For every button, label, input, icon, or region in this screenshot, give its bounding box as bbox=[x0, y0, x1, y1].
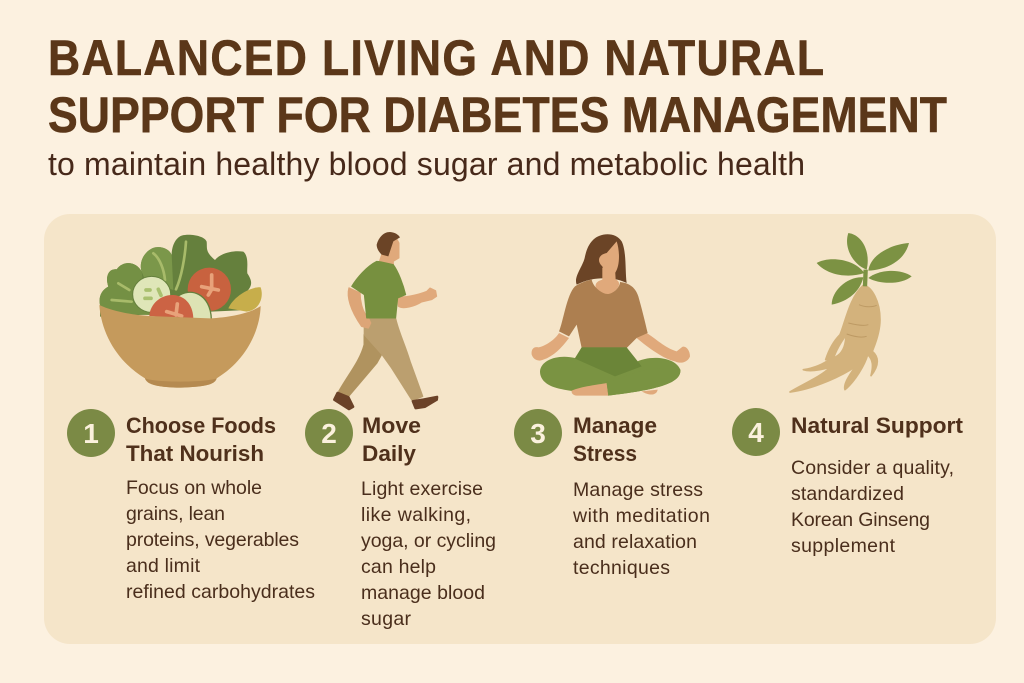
body 1: grains, lean bbox=[126, 503, 225, 525]
heading 1: That Nourish bbox=[126, 441, 264, 466]
body 4: Korean Ginseng bbox=[791, 509, 930, 531]
body 2 bbox=[361, 478, 496, 630]
icon: walking man bbox=[334, 232, 437, 409]
icon: ginseng root bbox=[790, 233, 912, 392]
title: BALANCED LIVING AND NATURAL bbox=[48, 31, 824, 87]
heading 2: Daily bbox=[362, 441, 416, 466]
heading 4: Natural Support bbox=[791, 413, 963, 438]
icon: meditating woman bbox=[532, 234, 690, 396]
heading 2 bbox=[362, 413, 421, 466]
heading 3: Manage bbox=[573, 413, 657, 438]
body 1 bbox=[126, 477, 315, 603]
body 1: and limit bbox=[126, 555, 201, 577]
body 4: standardized bbox=[791, 483, 904, 505]
heading 1: Choose Foods bbox=[126, 413, 276, 438]
main panel bbox=[44, 214, 996, 644]
number badge 4: 4 bbox=[748, 417, 764, 448]
title: SUPPORT FOR DIABETES MANAGEMENT bbox=[48, 88, 947, 144]
icon: salad bowl bbox=[99, 235, 262, 388]
body 4: Consider a quality, bbox=[791, 457, 954, 479]
number badge 1 bbox=[67, 409, 115, 457]
subtitle: to maintain healthy blood sugar and metabolic health bbox=[48, 146, 805, 182]
heading 2: Move bbox=[362, 413, 421, 438]
body 1: refined carbohydrates bbox=[126, 581, 315, 603]
body 2: sugar bbox=[361, 608, 412, 630]
body 3 bbox=[572, 479, 710, 579]
number badge 1: 1 bbox=[83, 418, 99, 449]
panel: step 3 stress bbox=[514, 234, 710, 579]
number badge 2: 2 bbox=[321, 418, 337, 449]
body 2: like walking, bbox=[361, 504, 471, 526]
panel: step 4 natural support bbox=[732, 233, 963, 557]
number badge 2 bbox=[305, 409, 353, 457]
heading 3 bbox=[573, 413, 657, 466]
heading 1 bbox=[126, 413, 276, 466]
body 1: Focus on whole bbox=[126, 477, 262, 499]
number badge 3: 3 bbox=[530, 418, 546, 449]
heading 3: Stress bbox=[573, 441, 637, 466]
body 2: yoga, or cycling bbox=[361, 530, 496, 552]
body 3: techniques bbox=[573, 557, 670, 579]
panel: step 2 movement bbox=[305, 232, 496, 630]
panel: step 1 foods bbox=[67, 235, 315, 603]
body 1: proteins, vegerables bbox=[126, 529, 299, 551]
body 2: manage blood bbox=[361, 582, 485, 604]
number badge 3 bbox=[514, 409, 562, 457]
body 2: can help bbox=[361, 556, 436, 578]
title bbox=[48, 31, 947, 144]
body 3: and relaxation bbox=[573, 531, 697, 553]
body 4: supplement bbox=[791, 535, 896, 557]
body 3: with meditation bbox=[572, 505, 710, 527]
body 3: Manage stress bbox=[573, 479, 703, 501]
body 2: Light exercise bbox=[361, 478, 483, 500]
body 4 bbox=[791, 457, 954, 557]
number badge 4 bbox=[732, 408, 780, 456]
